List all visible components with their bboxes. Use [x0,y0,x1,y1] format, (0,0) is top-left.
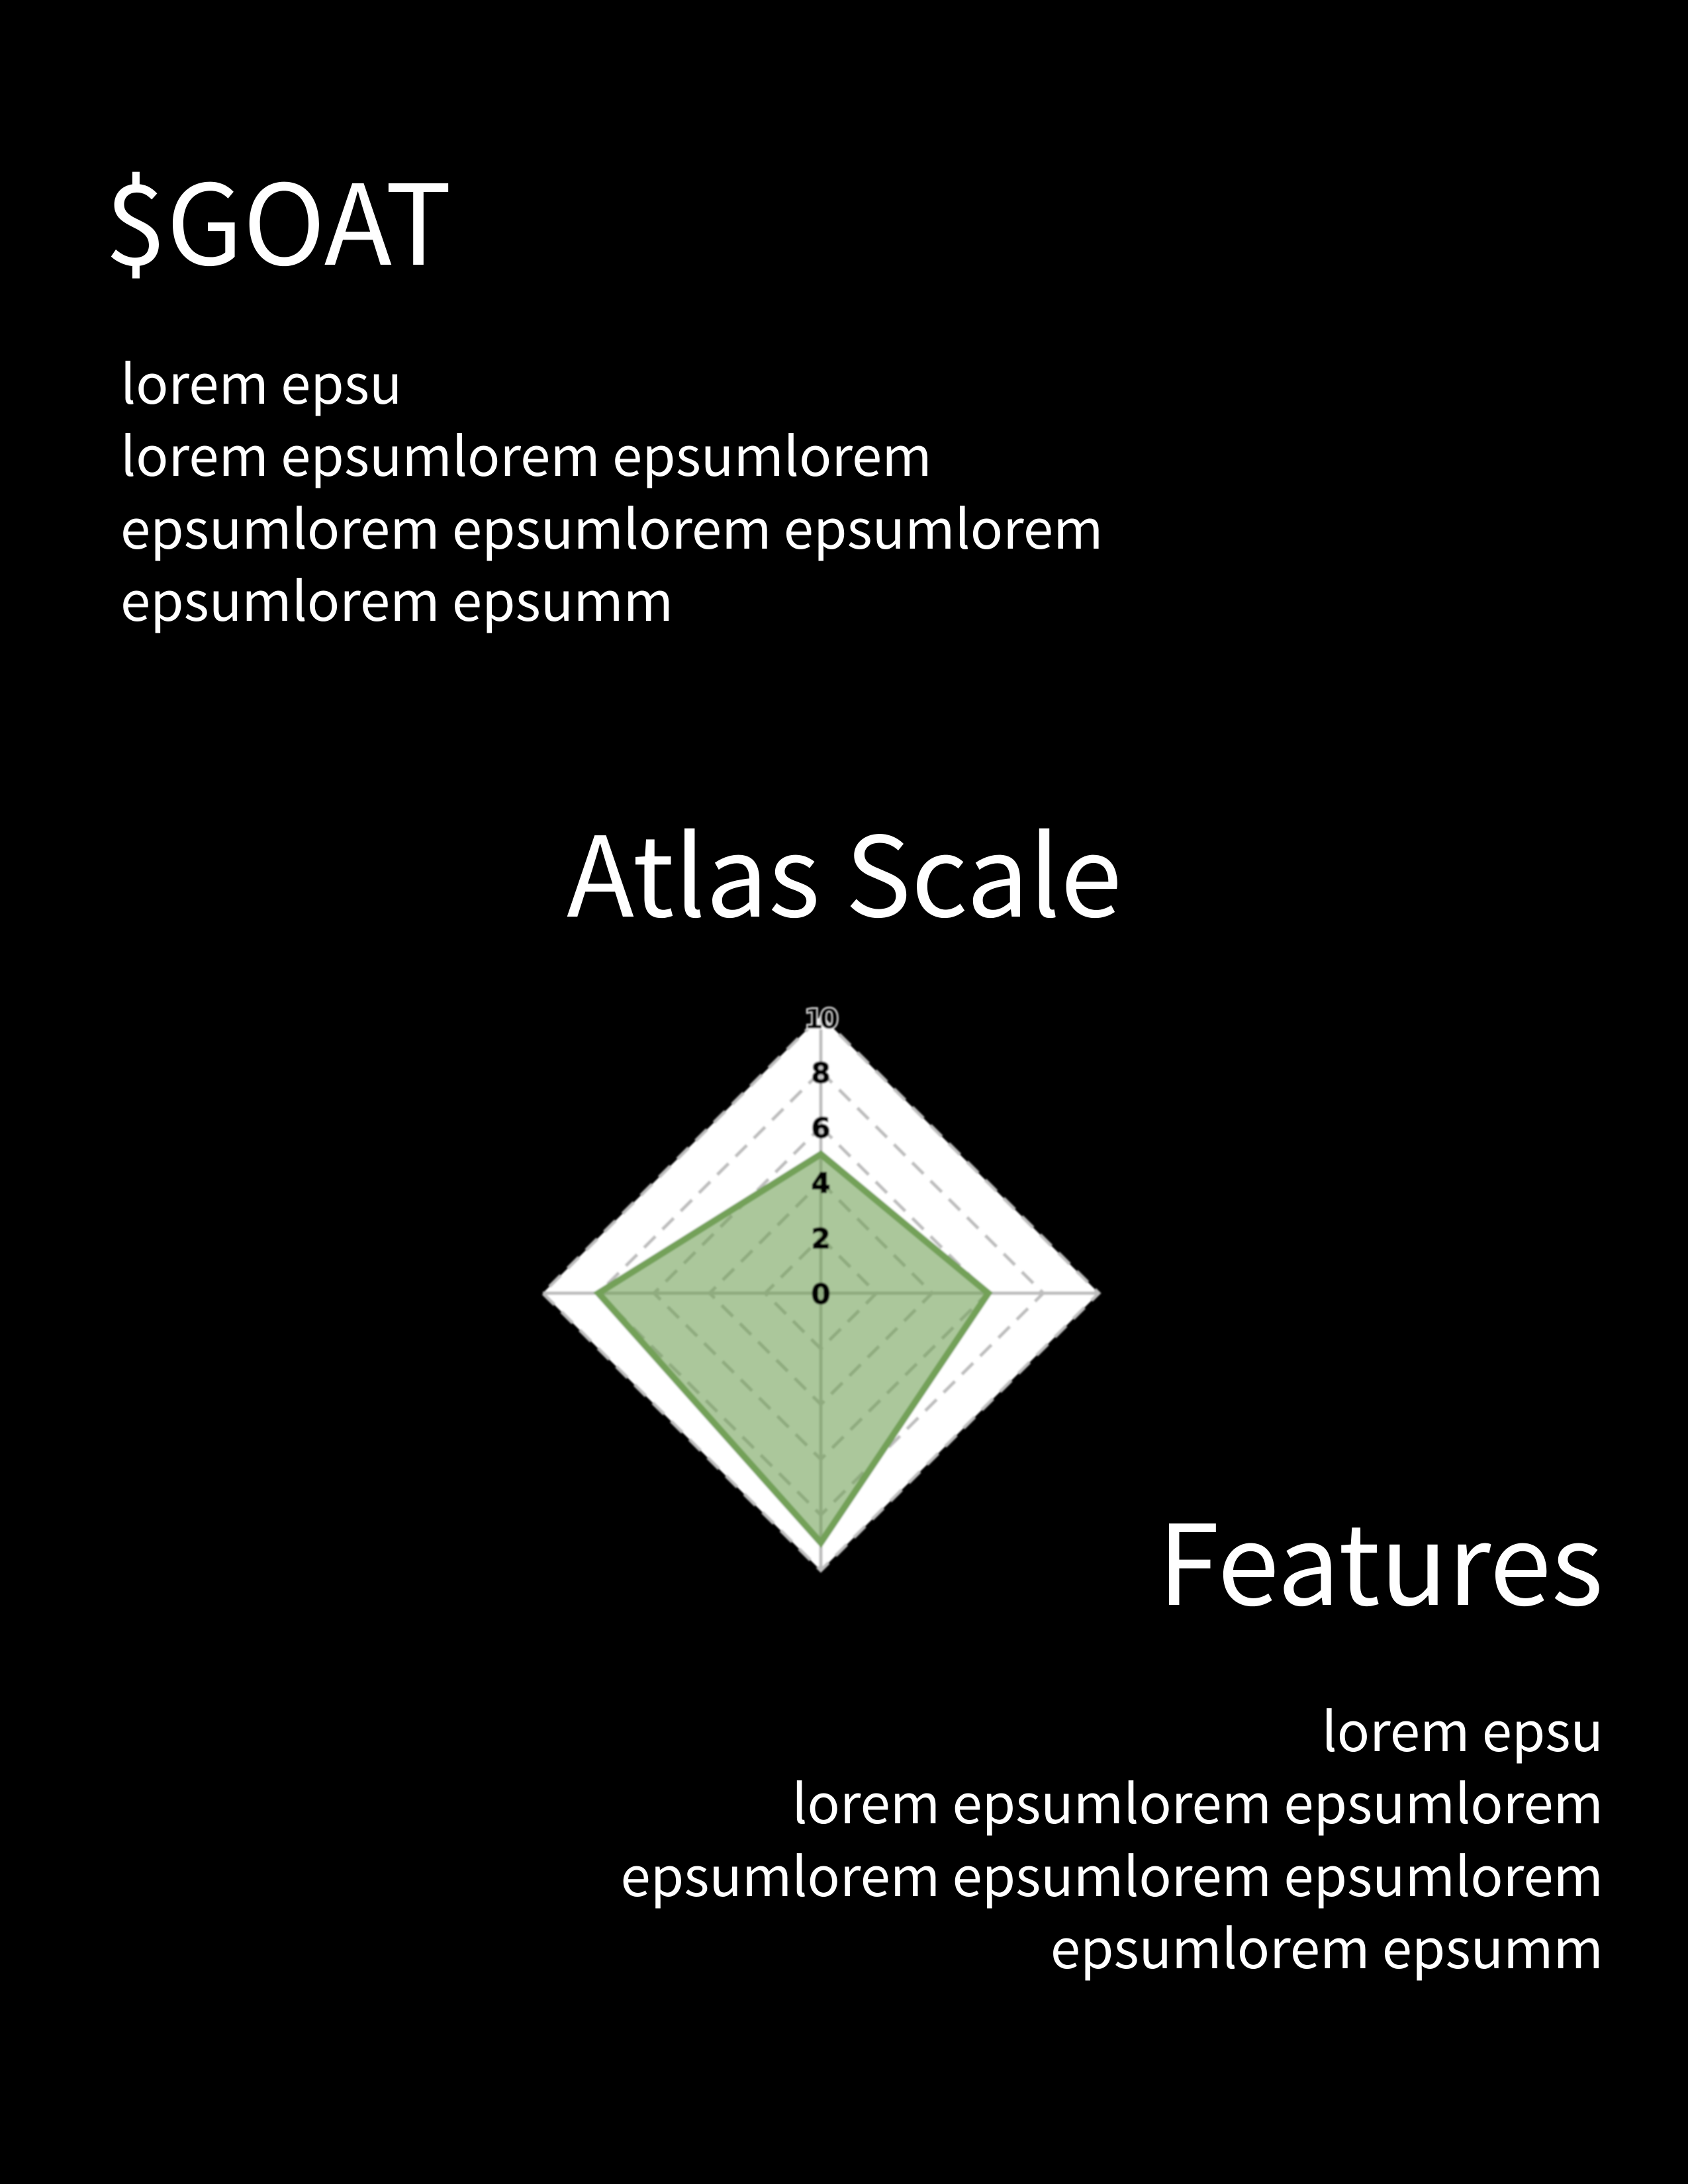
text block: features: lorem epsu lorem epsumlorem epsumlorem epsumlorem epsumlorem epsumlorem epsumlorem epsumm [621,1689,1603,1984]
heading: Features: Features [1158,1477,1603,1637]
text block: intro: lorem epsu lorem epsumlorem epsumlorem epsumlorem epsumlorem epsumlorem epsumlorem epsumm [120,341,1103,637]
scale labels: 4 [811,1167,831,1199]
radar grid [543,1016,1099,1570]
scale labels: 6 [811,1112,831,1144]
title: $GOAT: $GOAT [105,136,451,297]
radar chart [541,1003,1102,1574]
scale labels: 10 [804,1003,838,1035]
heading: Atlas Scale: Atlas Scale [567,789,1122,949]
scale labels: 0 [811,1278,831,1310]
radar background [543,1016,1099,1570]
scale labels: 2 [811,1222,831,1255]
scale labels [804,1003,838,1310]
radar axes [543,1016,1099,1570]
data polygon [598,1154,988,1543]
scale labels: 8 [811,1057,831,1089]
